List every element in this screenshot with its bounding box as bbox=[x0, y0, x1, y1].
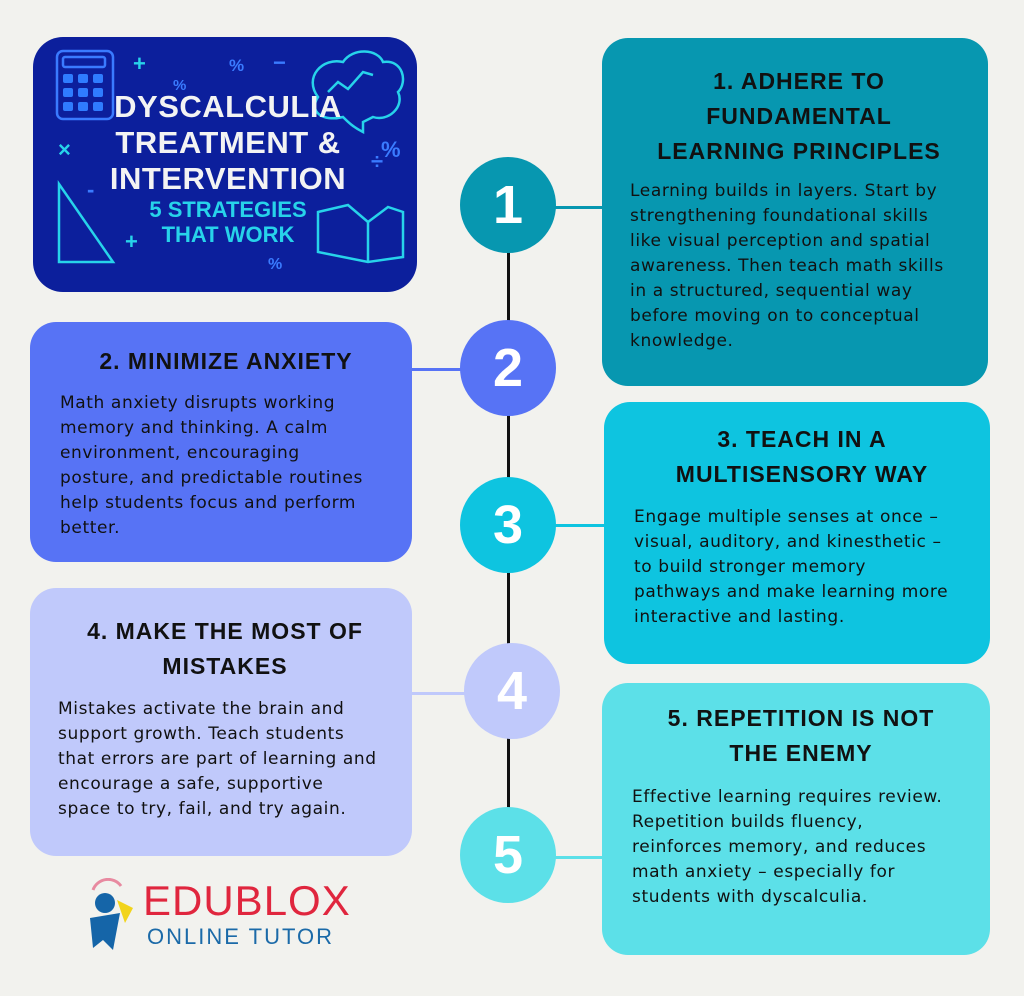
card 5: students with dyscalculia. bbox=[632, 887, 868, 907]
card 1: strengthening foundational skills bbox=[630, 206, 928, 226]
card 2: environment, encouraging bbox=[60, 443, 300, 463]
card 3: 3. TEACH IN A bbox=[717, 426, 887, 452]
card 1: 1. ADHERE TO bbox=[713, 68, 885, 94]
icon: triangle bbox=[59, 184, 113, 262]
card 1: in a structured, sequential way bbox=[630, 281, 912, 301]
card 1: LEARNING PRINCIPLES bbox=[657, 138, 941, 164]
card 4: support growth. Teach students bbox=[58, 724, 344, 744]
card 5 bbox=[602, 683, 990, 955]
card 3: to build stronger memory bbox=[634, 557, 866, 577]
card 5: math anxiety – especially for bbox=[632, 862, 895, 882]
card 3 bbox=[604, 402, 990, 664]
card 1: Learning builds in layers. Start by bbox=[630, 181, 937, 201]
card 2: 2. MINIMIZE ANXIETY bbox=[99, 348, 353, 374]
card 2: Math anxiety disrupts working bbox=[60, 393, 335, 413]
logo: EDUBLOX bbox=[143, 877, 351, 924]
circle 3 bbox=[460, 477, 556, 573]
card 4: MISTAKES bbox=[162, 653, 288, 679]
circle 5 bbox=[460, 807, 556, 903]
card 2: better. bbox=[60, 518, 120, 538]
card 2: posture, and predictable routines bbox=[60, 468, 363, 488]
title panel: % bbox=[381, 137, 401, 162]
circle 5: 5 bbox=[493, 825, 523, 885]
card 1 bbox=[602, 38, 988, 386]
card 5: 5. REPETITION IS NOT bbox=[668, 705, 934, 731]
title text: DYSCALCULIA bbox=[114, 89, 342, 124]
circle 4: 4 bbox=[497, 661, 527, 721]
card 1: knowledge. bbox=[630, 331, 734, 351]
vertical timeline line bbox=[507, 205, 510, 855]
circle 4 bbox=[464, 643, 560, 739]
card 2 bbox=[30, 322, 412, 562]
icon: logo figure bbox=[90, 878, 133, 950]
subtitle: THAT WORK bbox=[162, 222, 294, 247]
logo: ONLINE TUTOR bbox=[147, 924, 334, 949]
card 1: before moving on to conceptual bbox=[630, 306, 920, 326]
card 5: Effective learning requires review. bbox=[632, 787, 942, 807]
circle 2 bbox=[460, 320, 556, 416]
card 3: MULTISENSORY WAY bbox=[676, 461, 928, 487]
card 1: FUNDAMENTAL bbox=[706, 103, 892, 129]
card 3: Engage multiple senses at once – bbox=[634, 507, 938, 527]
title panel: + bbox=[125, 229, 138, 254]
title text: TREATMENT & bbox=[115, 125, 341, 160]
title panel: % bbox=[268, 256, 282, 273]
connectors bbox=[508, 206, 608, 209]
icon: book bbox=[318, 205, 403, 262]
logo bbox=[90, 877, 351, 950]
card 2: help students focus and perform bbox=[60, 493, 356, 513]
title panel: ÷ bbox=[371, 149, 383, 174]
circle 1: 1 bbox=[493, 175, 523, 235]
title panel bbox=[33, 37, 417, 292]
subtitle bbox=[149, 197, 307, 247]
card 4: Mistakes activate the brain and bbox=[58, 699, 344, 719]
card 1: like visual perception and spatial bbox=[630, 231, 930, 251]
title panel: % bbox=[173, 77, 186, 94]
circle 3: 3 bbox=[493, 495, 523, 555]
card 4 bbox=[30, 588, 412, 856]
title panel: × bbox=[58, 137, 71, 162]
card 5: reinforces memory, and reduces bbox=[632, 837, 926, 857]
subtitle: 5 STRATEGIES bbox=[149, 197, 307, 222]
card 1: awareness. Then teach math skills bbox=[630, 256, 944, 276]
card 5: Repetition builds fluency, bbox=[632, 812, 863, 832]
card 3: visual, auditory, and kinesthetic – bbox=[634, 532, 942, 552]
circle 2: 2 bbox=[493, 338, 523, 398]
card 4: that errors are part of learning and bbox=[58, 749, 377, 769]
card 4: encourage a safe, supportive bbox=[58, 774, 323, 794]
title panel: % bbox=[229, 56, 244, 75]
icon: calculator bbox=[57, 51, 113, 119]
card 5: THE ENEMY bbox=[729, 740, 873, 766]
title panel: - bbox=[87, 177, 94, 202]
circle 1 bbox=[460, 157, 556, 253]
title panel: − bbox=[273, 50, 286, 75]
card 4: 4. MAKE THE MOST OF bbox=[87, 618, 363, 644]
icon: brain bbox=[313, 51, 403, 132]
title text bbox=[110, 89, 346, 196]
card 3: pathways and make learning more bbox=[634, 582, 948, 602]
card 2: memory and thinking. A calm bbox=[60, 418, 328, 438]
card 3: interactive and lasting. bbox=[634, 607, 845, 627]
title text: INTERVENTION bbox=[110, 161, 346, 196]
title panel: + bbox=[133, 51, 146, 76]
card 4: space to try, fail, and try again. bbox=[58, 799, 346, 819]
